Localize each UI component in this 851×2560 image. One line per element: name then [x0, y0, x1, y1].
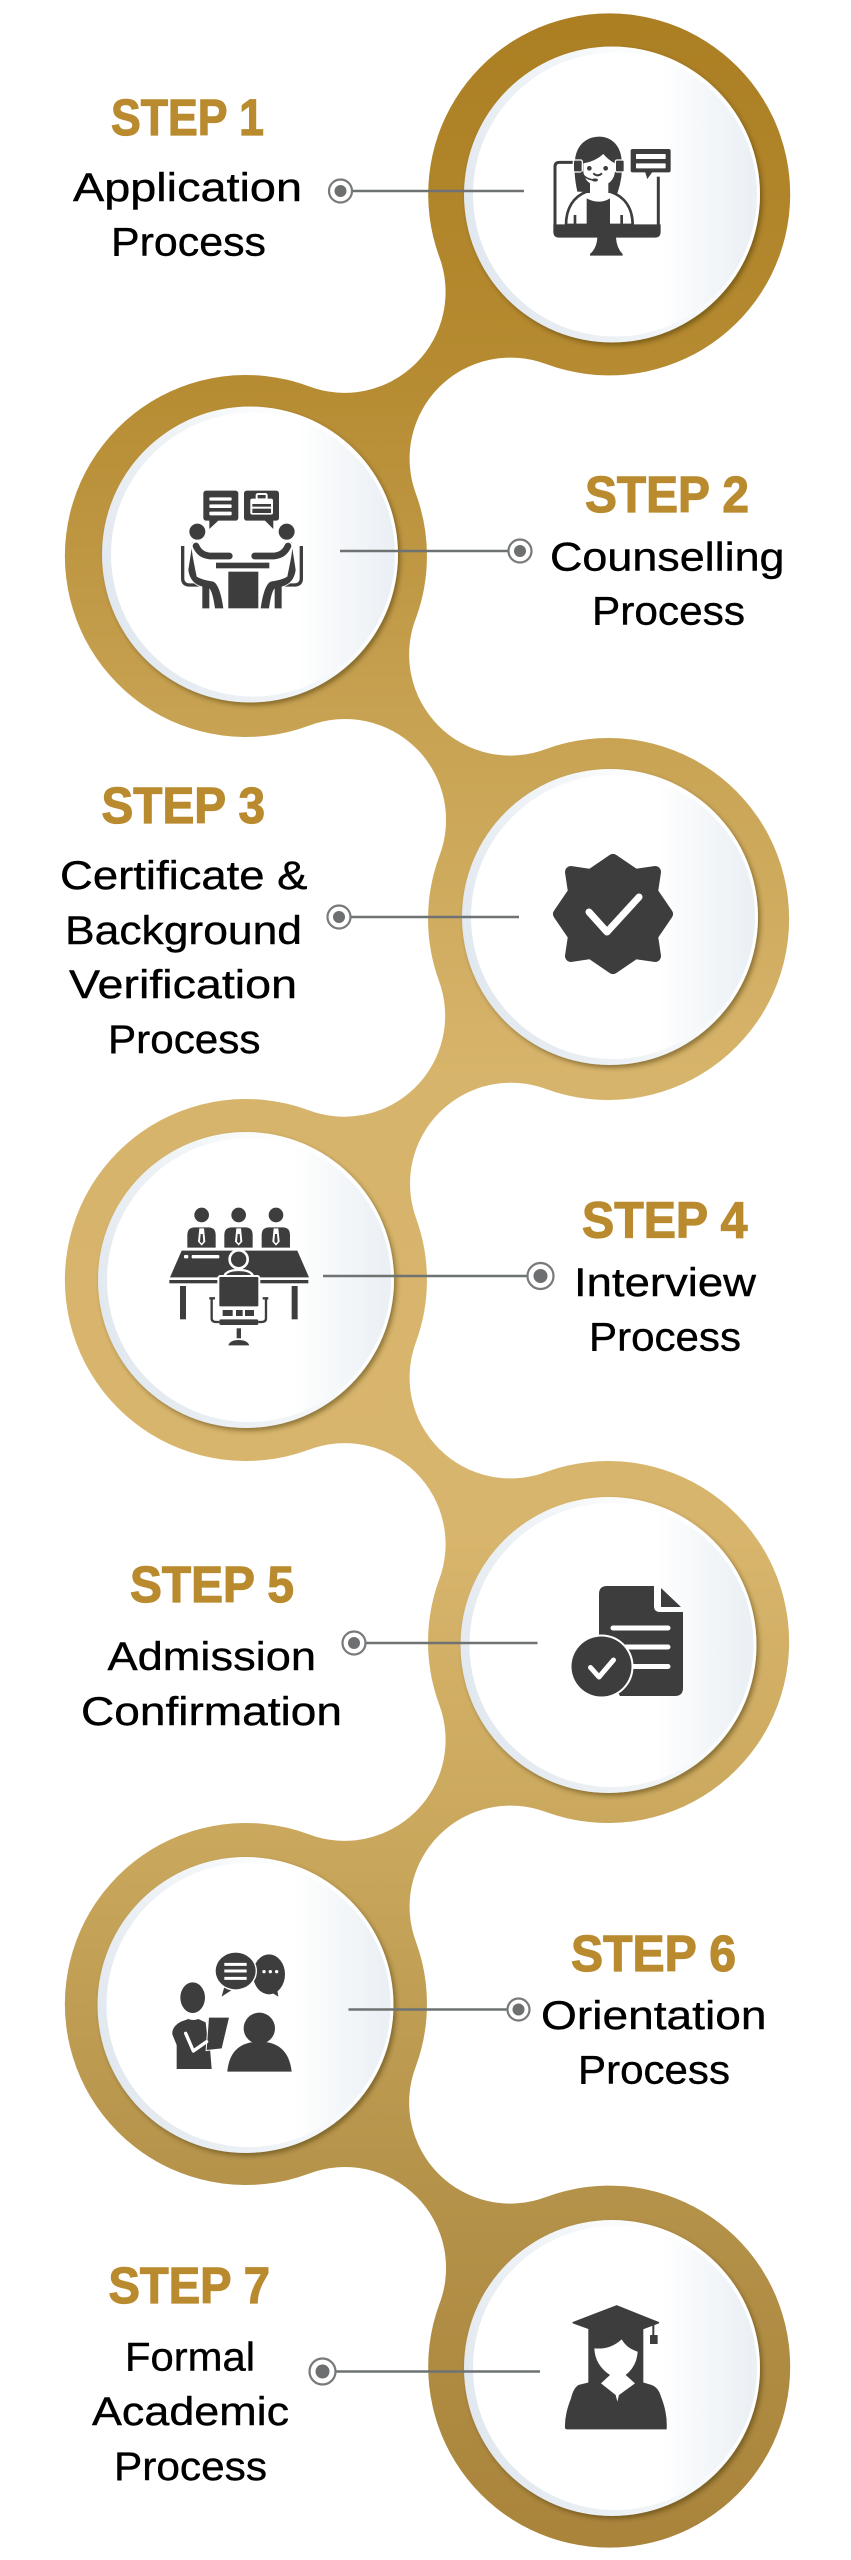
- step 7 description: Academic: [92, 2390, 289, 2434]
- step 2 panel: [102, 406, 784, 702]
- step 2 description: Counselling: [550, 536, 784, 580]
- step 7 white disc: [464, 2220, 760, 2516]
- step 5 panel: [81, 1497, 756, 1793]
- step 7 description: Formal: [125, 2336, 255, 2380]
- connector 2: [340, 540, 532, 562]
- connector 1: [329, 180, 524, 202]
- step 1 description: [73, 166, 302, 264]
- step 7 description: [92, 2336, 289, 2489]
- step 1 panel: [73, 46, 760, 342]
- connector 3: [328, 906, 519, 928]
- icon: online counsellor on monitor: [553, 137, 671, 256]
- step 3 description: Background: [65, 909, 302, 953]
- step 7 panel: [92, 2220, 760, 2516]
- step 7 heading: STEP 7: [108, 2257, 270, 2314]
- step 3 heading: STEP 3: [102, 777, 265, 834]
- icon: verified badge: [559, 860, 667, 968]
- step 5 description: Admission: [108, 1635, 316, 1679]
- connector 6: [348, 1998, 530, 2020]
- step 7 description: Process: [114, 2445, 267, 2489]
- step 6 description: [541, 1994, 766, 2092]
- icon: graduate: [565, 2306, 667, 2429]
- step 3 white disc: [462, 769, 758, 1065]
- step 5 description: Confirmation: [81, 1690, 342, 1734]
- step 3 description: Verification: [69, 963, 297, 1007]
- step 6 description: Orientation: [541, 1994, 766, 2038]
- step 6 white disc: [98, 1857, 394, 2153]
- icon: orientation conversation: [172, 1953, 292, 2072]
- step 6 description: Process: [578, 2048, 730, 2092]
- connector 5: [342, 1632, 538, 1654]
- step 1 white disc: [464, 46, 760, 342]
- icon: interview panel: [169, 1208, 309, 1345]
- step 5 heading: STEP 5: [130, 1556, 294, 1613]
- connector 7: [310, 2358, 540, 2384]
- icon: approved document: [572, 1586, 683, 1696]
- step 3 panel: [60, 769, 758, 1065]
- step 2 white disc: [102, 406, 398, 702]
- step 4 description: Process: [589, 1316, 741, 1360]
- step 1 description: Process: [111, 220, 266, 264]
- step 2 description: [550, 536, 784, 634]
- step 4 white disc: [98, 1132, 394, 1428]
- step 1 heading: STEP 1: [111, 89, 264, 146]
- step 6 panel: [98, 1857, 766, 2153]
- step 2 heading: STEP 2: [585, 466, 749, 523]
- step 5 white disc: [460, 1497, 756, 1793]
- step 4 description: Interview: [574, 1261, 756, 1305]
- step 3 description: [60, 854, 308, 1062]
- step 4 heading: STEP 4: [582, 1192, 748, 1248]
- connector 4: [323, 1263, 554, 1289]
- step 1 description: Application: [73, 166, 302, 210]
- step 4 description: [574, 1261, 756, 1360]
- step 5 description: [81, 1635, 342, 1734]
- icon: two people meeting at a table: [183, 491, 301, 608]
- step 4 panel: [98, 1132, 756, 1428]
- step 6 heading: STEP 6: [571, 1925, 736, 1982]
- step 3 description: Process: [108, 1018, 260, 1062]
- step 3 description: Certificate &: [60, 854, 308, 898]
- step 2 description: Process: [592, 590, 745, 634]
